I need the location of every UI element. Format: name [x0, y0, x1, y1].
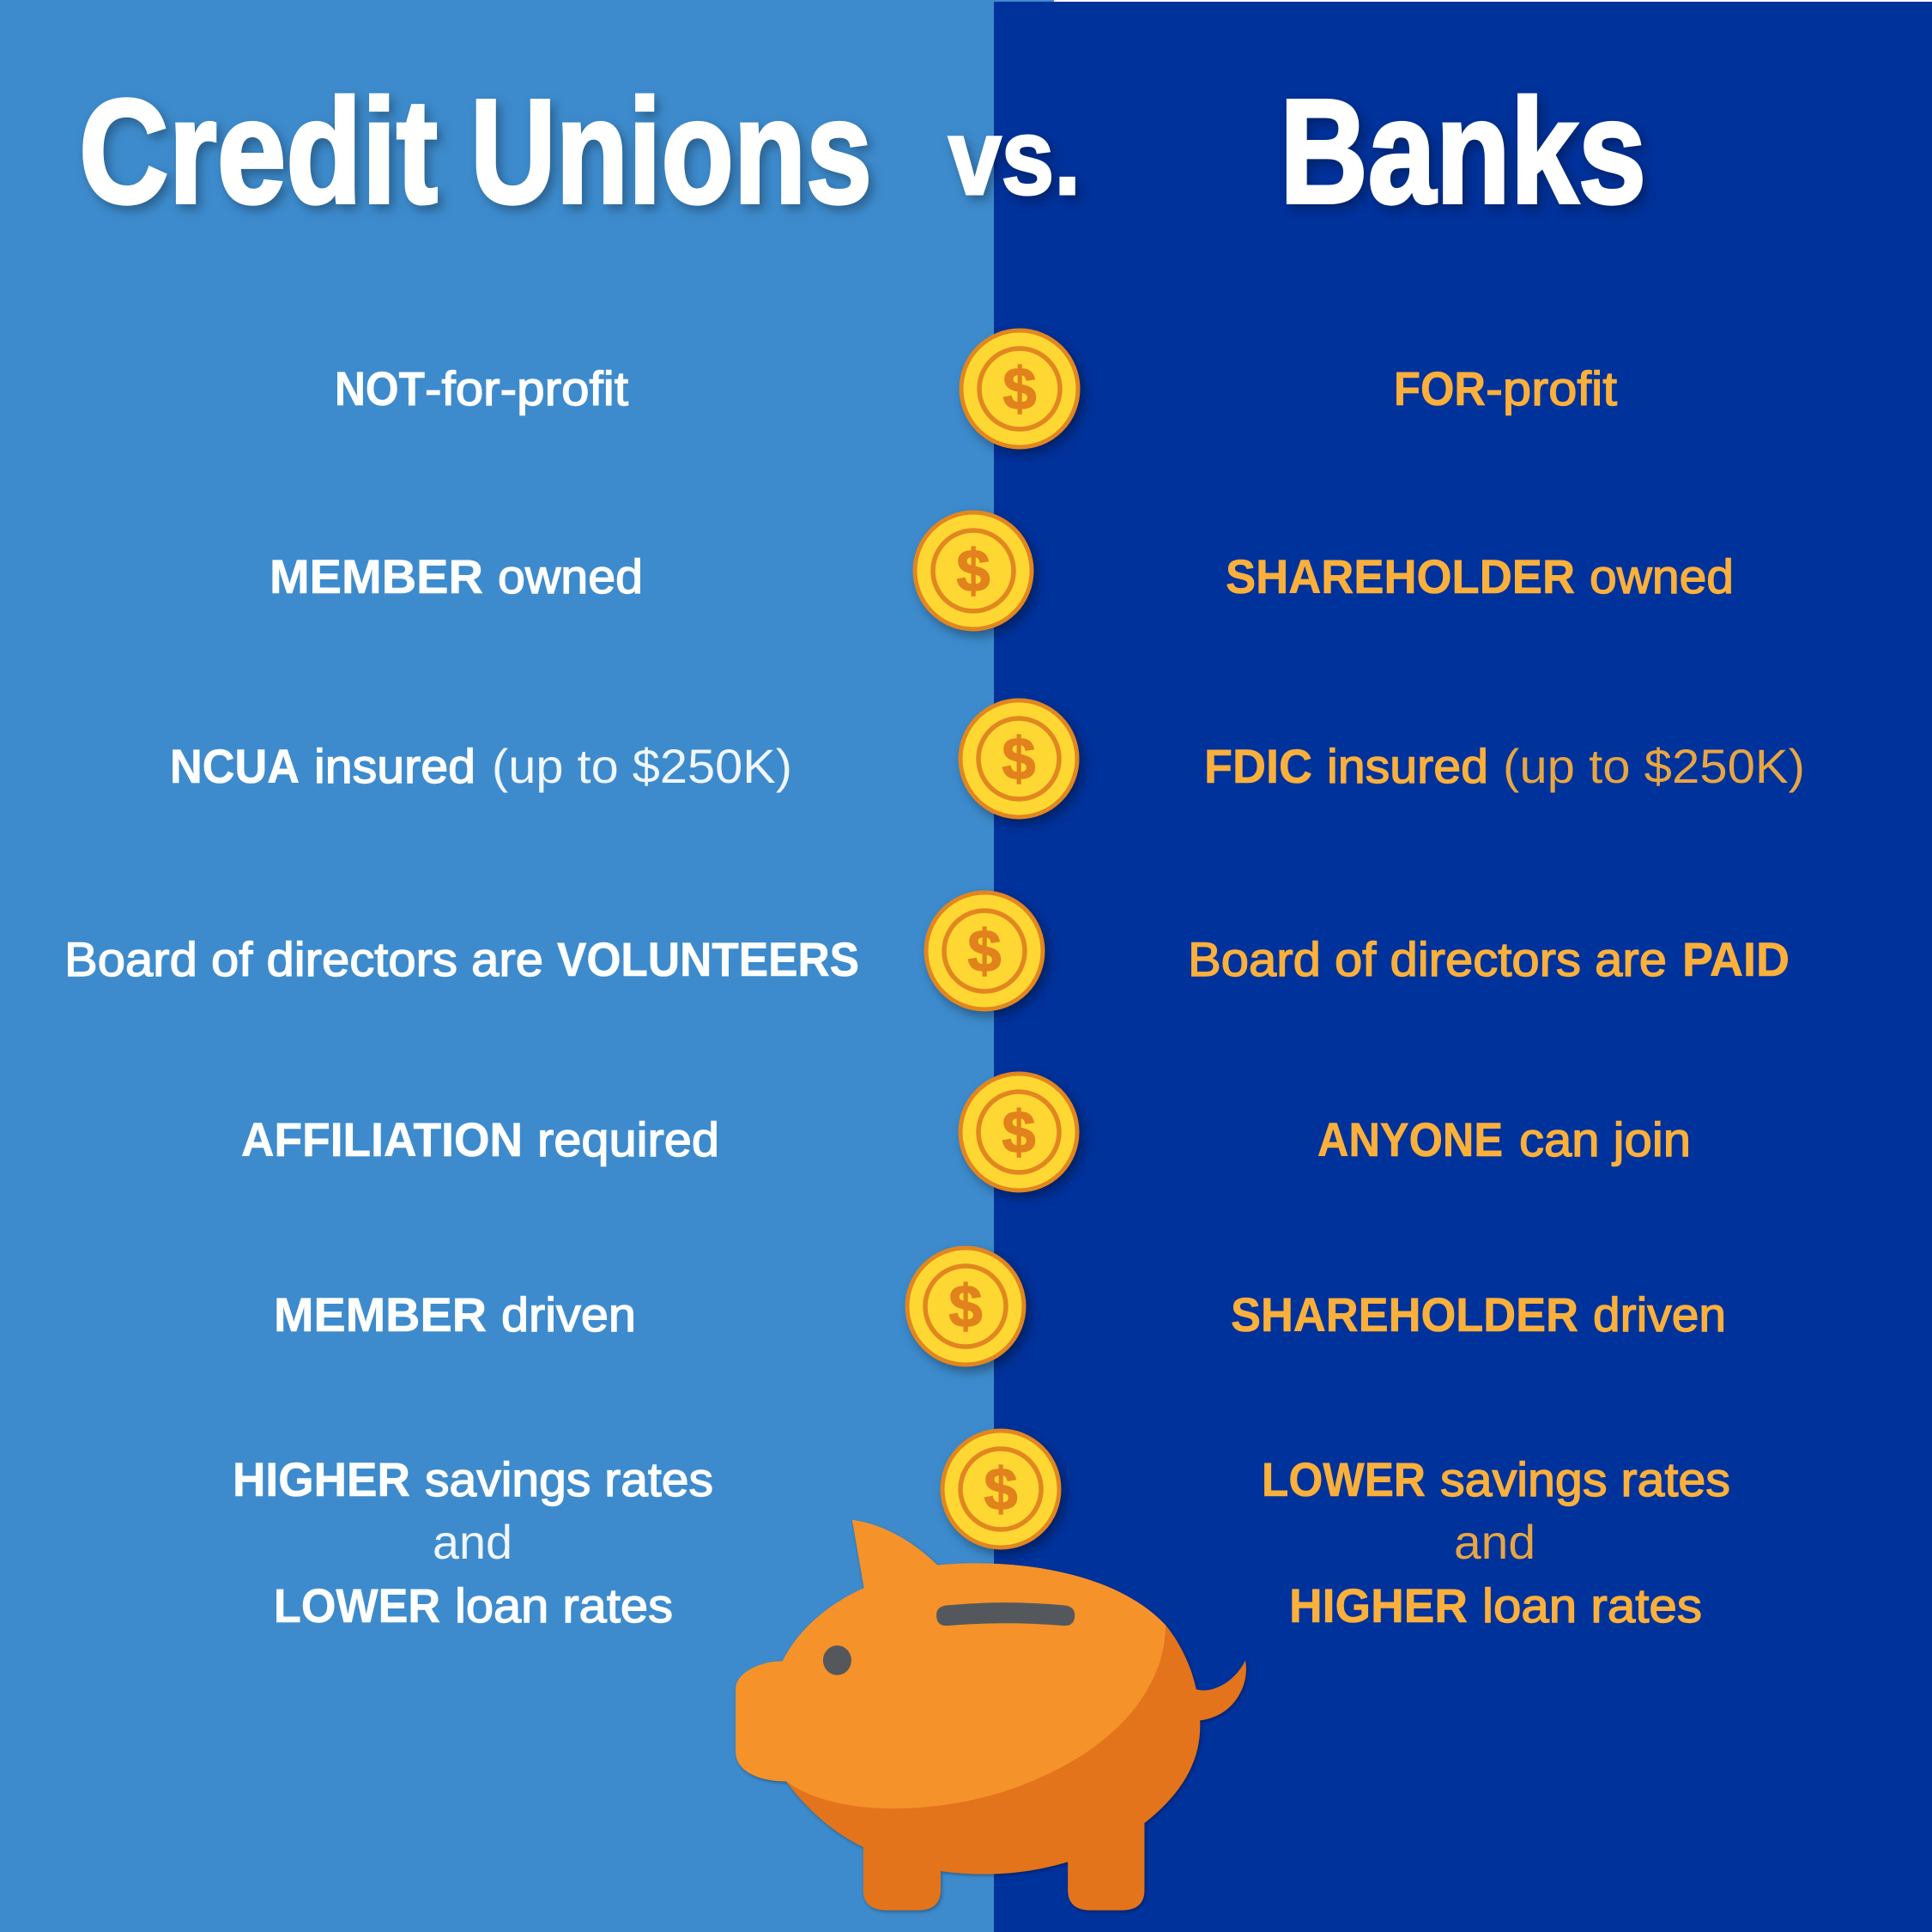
icon: coin 5 [960, 1074, 1077, 1190]
text: MEMBER owned: MEMBER [270, 549, 483, 603]
text: FDIC insured: FDIC [1204, 739, 1312, 793]
title: Banks: Banks [1280, 68, 1646, 234]
text: Board of directors are PAID: Board of directors are [1188, 932, 1667, 986]
icon: coin 3: $ [1002, 725, 1035, 792]
text: FOR-profit: FOR [1394, 361, 1486, 415]
panel: credit unions background [0, 0, 994, 1932]
icon: piggy bank [736, 1520, 1246, 1911]
text: Board of directors are VOLUNTEERS: VOLUNTEERS [557, 932, 859, 986]
pig body shadow tone [736, 1520, 1246, 1911]
text: HIGHER savings rates: savings rates [425, 1452, 713, 1506]
text: MEMBER driven: MEMBER [274, 1287, 487, 1341]
pig body highlight [736, 1520, 1166, 1808]
text: NOT-for-profit: NOT [335, 361, 425, 415]
icon: coin 4 [926, 893, 1043, 1009]
text: LOWER loan rates: loan rates [455, 1578, 673, 1632]
text: SHAREHOLDER driven: SHAREHOLDER [1231, 1287, 1578, 1341]
icon: coin 4: $ [968, 918, 1001, 984]
icon: coin 2: $ [957, 537, 990, 604]
icon: coin 2 [915, 512, 1032, 629]
text: ANYONE can join: can join [1519, 1112, 1691, 1166]
text: FDIC insured: (up to $250K) [1503, 739, 1805, 793]
pig coin slot [936, 1602, 1075, 1626]
icon: coin 3 [960, 700, 1077, 817]
panel: banks background [994, 2, 1932, 1932]
icon: coin 1: $ [1003, 355, 1036, 422]
text: ANYONE can join: ANYONE [1317, 1112, 1503, 1166]
text: Board of directors are PAID: PAID [1682, 932, 1790, 986]
icon: coin 6: $ [949, 1273, 982, 1340]
text: LOWER savings rates: savings rates [1440, 1452, 1730, 1506]
icon: coin 5: $ [1002, 1099, 1035, 1166]
text: MEMBER owned: owned [498, 549, 643, 603]
text: NCUA insured: NCUA [170, 739, 300, 793]
icon: coin 7 [942, 1431, 1059, 1547]
icon: coin 1 [961, 330, 1078, 447]
text: NCUA insured: insured [314, 739, 475, 793]
icon: coin 6 [907, 1248, 1024, 1365]
text: AFFILIATION required: required [537, 1112, 719, 1166]
text: LOWER savings rates: LOWER [1262, 1452, 1426, 1506]
text: SHAREHOLDER owned: owned [1590, 549, 1734, 603]
text: NCUA insured: (up to $250K) [492, 739, 792, 793]
text: and: and [1454, 1515, 1535, 1569]
text: HIGHER savings rates: HIGHER [233, 1452, 410, 1506]
text: SHAREHOLDER owned: SHAREHOLDER [1226, 549, 1575, 603]
text: AFFILIATION required: AFFILIATION [241, 1112, 523, 1166]
text: and: and [433, 1515, 512, 1569]
text: FDIC insured: insured [1327, 739, 1488, 793]
text: SHAREHOLDER driven: driven [1593, 1287, 1726, 1341]
icon: coin 7: $ [984, 1456, 1017, 1523]
text: FOR-profit: -profit [1486, 361, 1617, 415]
text: HIGHER loan rates: loan rates [1482, 1578, 1702, 1632]
credit union column: comparison text [64, 361, 859, 1632]
text: LOWER loan rates: LOWER [274, 1578, 440, 1632]
text: MEMBER driven: driven [501, 1287, 636, 1341]
pig eye [823, 1645, 851, 1675]
text: NOT-for-profit: -for-profit [425, 361, 628, 415]
title: Credit Unions: Unions [470, 68, 872, 234]
text: HIGHER loan rates: HIGHER [1289, 1578, 1468, 1632]
title: vs.: vs. [948, 98, 1081, 217]
bank column: comparison text [1188, 361, 1805, 1632]
title: Credit Unions: Credit [79, 68, 438, 234]
text: Board of directors are VOLUNTEERS: Board of directors are [64, 932, 543, 986]
